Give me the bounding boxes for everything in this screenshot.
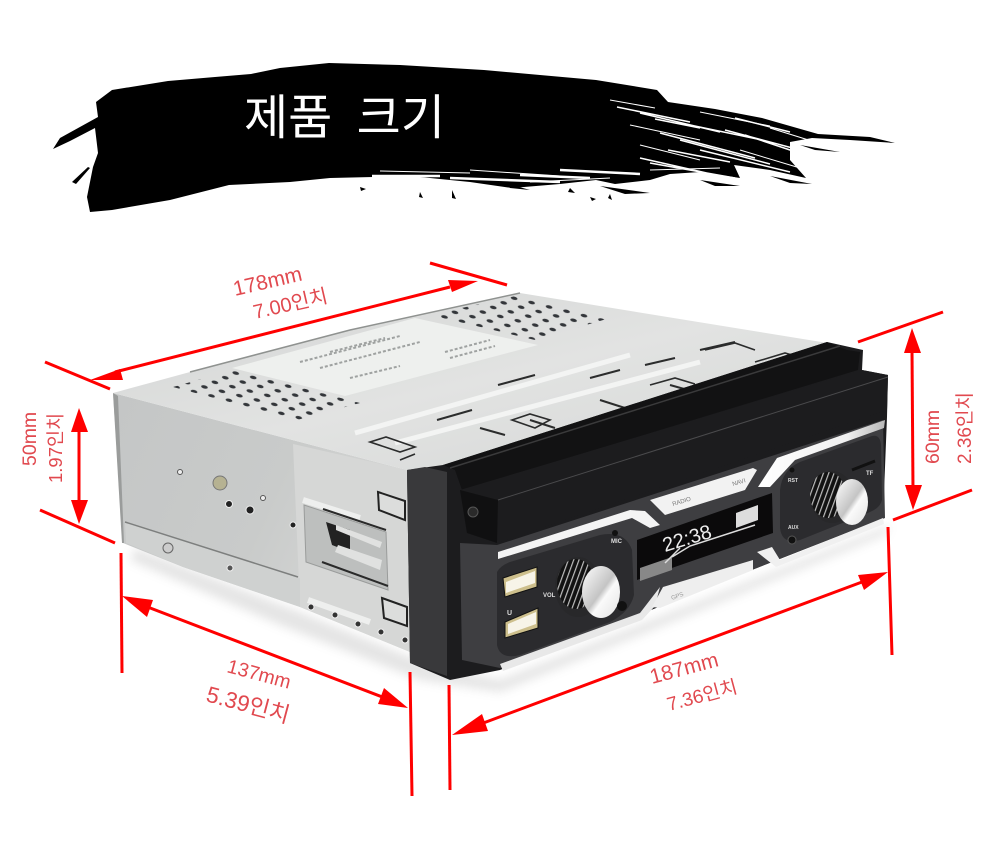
white trim strips xyxy=(498,420,885,671)
volume knob: MIC xyxy=(611,539,623,545)
label: 60mm xyxy=(922,392,976,464)
knob recesses xyxy=(497,436,882,656)
dimension: 137mm width arrow xyxy=(121,553,412,796)
LCD display xyxy=(637,493,773,581)
label: 178mm: 7.00인치 xyxy=(251,284,330,324)
label: 137mm xyxy=(204,656,293,728)
dimension: 187mm front width arrow xyxy=(449,527,892,790)
right knob: RST xyxy=(788,478,798,484)
ink brush banner xyxy=(53,63,895,212)
rear perforation xyxy=(173,370,360,420)
product: car radio head unit xyxy=(113,293,890,692)
dimension: 60mm height arrow xyxy=(858,312,972,520)
label: 178mm: 178mm xyxy=(231,263,304,301)
label sticker xyxy=(232,318,538,396)
right knob: AUX xyxy=(788,525,799,531)
label: 187mm: 7.36인치 xyxy=(665,676,740,716)
dimension: 178mm depth arrow xyxy=(45,263,507,389)
right knob: TF xyxy=(866,471,874,477)
title: 제품 크기 xyxy=(244,92,445,145)
top rail xyxy=(443,342,860,490)
label: 187mm xyxy=(647,648,740,716)
label: 137mm: 137mm xyxy=(225,656,293,694)
right knob xyxy=(788,461,875,544)
label: 60mm: 60mm xyxy=(922,410,944,464)
label: 50mm xyxy=(19,412,66,483)
volume knob: VOL xyxy=(543,593,556,599)
side panel details xyxy=(125,470,408,643)
label: 50mm: 1.97인치 xyxy=(45,413,66,483)
label: 178mm xyxy=(231,263,330,324)
label: 137mm: 5.39인치 xyxy=(204,682,292,728)
chassis top face xyxy=(113,293,840,470)
volume knob xyxy=(543,530,627,618)
label: 60mm: 2.36인치 xyxy=(954,392,976,464)
chassis back edge xyxy=(113,393,124,543)
front bezel xyxy=(407,342,888,680)
dimension: 50mm height arrow xyxy=(40,408,115,543)
face plate xyxy=(460,420,885,668)
buttons: RADIO xyxy=(672,497,692,508)
label: 187mm: 187mm xyxy=(647,648,721,689)
brush dry streaks xyxy=(372,100,820,188)
buttons: GPS xyxy=(671,592,685,602)
flip panel xyxy=(460,370,888,543)
USB ports xyxy=(503,567,538,638)
top embossed ribs and slots xyxy=(355,342,802,460)
front perforation xyxy=(430,295,610,340)
USB ports: U xyxy=(507,610,512,617)
ground shadow xyxy=(130,525,890,692)
label: 50mm: 50mm xyxy=(19,412,41,466)
buttons: NAVI xyxy=(732,478,747,488)
chassis side face xyxy=(113,393,410,652)
buttons xyxy=(650,468,757,608)
side right panel xyxy=(293,444,410,652)
LCD display: 22:38 xyxy=(660,521,714,557)
